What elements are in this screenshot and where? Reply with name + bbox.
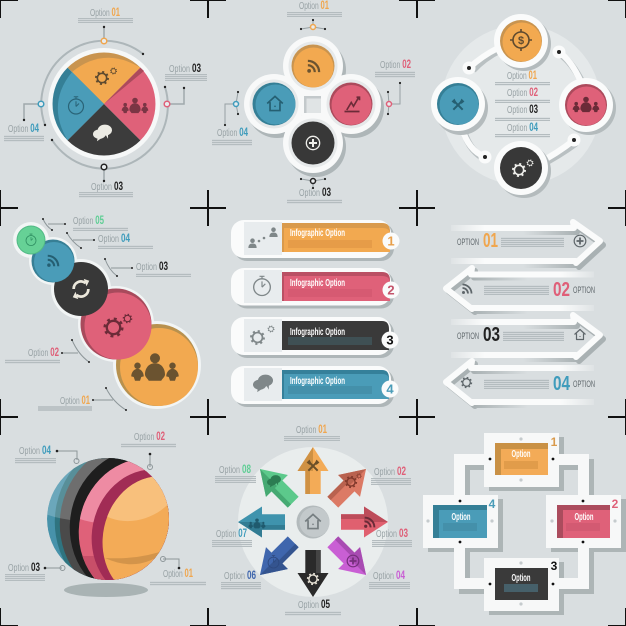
label: Option 01 bbox=[284, 422, 340, 441]
pill 1: Infographic Option bbox=[290, 228, 345, 239]
box 1 orange: Option bbox=[512, 449, 530, 460]
label: Option 01: Option 01 bbox=[90, 5, 120, 19]
label: Option 04: Option 04 bbox=[19, 443, 51, 457]
pie slice: blue stopwatch bbox=[53, 68, 104, 140]
label: Option 01: Option 01 bbox=[163, 566, 193, 580]
box 1 orange: 1 bbox=[551, 435, 558, 449]
label: Option 03 bbox=[5, 560, 45, 581]
box 4 blue bbox=[423, 495, 498, 548]
box 4 blue: Option bbox=[452, 512, 470, 523]
box 3 dark: 3 bbox=[551, 559, 558, 573]
label: Option 04 bbox=[15, 443, 56, 464]
circle: dark plus bbox=[288, 118, 338, 168]
box 2 pink: 2 bbox=[612, 497, 619, 511]
box 3 dark bbox=[484, 558, 559, 611]
arrow 05 bbox=[298, 550, 328, 597]
label: Option 01: Option 01 bbox=[60, 393, 90, 407]
panel: layered sphere bbox=[5, 432, 206, 597]
arrow 2: 02 bbox=[553, 279, 570, 301]
arrow 1: 01 bbox=[483, 230, 498, 252]
label: Option 05 bbox=[73, 213, 128, 231]
label: Option 01 bbox=[287, 0, 342, 17]
pill 3 bbox=[231, 317, 398, 358]
label: Option 03 bbox=[372, 526, 412, 547]
panel: descending circles bbox=[5, 213, 201, 411]
label: Option 01 bbox=[38, 393, 92, 411]
arrow 4 bbox=[446, 361, 597, 406]
circle: pink gears bbox=[80, 288, 152, 360]
connector nodes bbox=[224, 19, 401, 189]
arrow 1: OPTION bbox=[457, 237, 479, 247]
sphere layers bbox=[47, 458, 169, 580]
circle: green stopwatch bbox=[16, 226, 46, 254]
label: Option 06 bbox=[221, 568, 261, 590]
circle: pink people bbox=[559, 78, 616, 135]
connector ring bbox=[454, 454, 589, 589]
label: Option 04: Option 04 bbox=[8, 121, 39, 135]
label: Option 01 bbox=[78, 5, 133, 23]
pale disc bbox=[238, 447, 388, 597]
sphere shadow bbox=[64, 583, 148, 597]
label: Option 05: Option 05 bbox=[298, 597, 330, 611]
sphere orange cap bbox=[102, 476, 169, 580]
label: Option 04: Option 04 bbox=[373, 568, 405, 582]
centre square bbox=[304, 96, 321, 113]
label: Option 04 bbox=[369, 568, 410, 589]
label: Option 03 bbox=[287, 185, 342, 204]
arrow 3: OPTION bbox=[457, 331, 479, 341]
pill 3: 3 bbox=[386, 332, 394, 348]
shadows bbox=[428, 437, 626, 615]
panel: connected boxes bbox=[423, 433, 626, 615]
circle: orange dollar bbox=[494, 14, 551, 71]
circle: blue home bbox=[250, 80, 298, 128]
cluster shadow bbox=[247, 40, 384, 177]
arrow 3 bbox=[451, 315, 603, 361]
label: Option 03: Option 03 bbox=[8, 560, 40, 574]
arrow 07 bbox=[238, 506, 285, 538]
connector end dots bbox=[467, 50, 576, 159]
pill 2: 2 bbox=[387, 282, 395, 298]
label: Option 08: Option 08 bbox=[219, 462, 251, 476]
arrow 08 bbox=[249, 458, 304, 513]
label: Option 03: Option 03 bbox=[376, 526, 408, 540]
centre hub bbox=[296, 506, 330, 538]
label: Option 03 right bbox=[165, 61, 207, 81]
circle: dark sync bbox=[54, 262, 108, 316]
label: Option 03 bottom: Option 03 bbox=[91, 179, 123, 193]
pill 1: 1 bbox=[387, 234, 395, 248]
connector nodes bbox=[23, 26, 185, 182]
pill 2 bbox=[231, 268, 400, 308]
label: Option 01: Option 01 bbox=[296, 422, 327, 436]
label: Option 03 right: Option 03 bbox=[169, 61, 201, 75]
pill 4: 4 bbox=[386, 382, 394, 396]
option 02: Option 02 bbox=[507, 85, 538, 99]
label: Option 02: Option 02 bbox=[134, 429, 165, 443]
label: Option 07: Option 07 bbox=[216, 526, 247, 540]
label: Option 02 bbox=[121, 429, 176, 448]
label: Option 02 bbox=[375, 57, 415, 78]
label: Option 08 bbox=[215, 462, 256, 483]
pale disc bbox=[441, 25, 601, 185]
pill 2: Infographic Option bbox=[290, 278, 345, 289]
label: Option 02: Option 02 bbox=[374, 464, 406, 478]
label: Option 07 bbox=[212, 526, 252, 547]
label: Option 05: Option 05 bbox=[73, 213, 104, 227]
box 4 blue: 4 bbox=[489, 497, 496, 511]
label: Option 02 bbox=[5, 345, 60, 364]
pie ring bbox=[48, 48, 160, 160]
option 03: Option 03 bbox=[507, 102, 538, 116]
pie slice: orange gears bbox=[68, 53, 140, 104]
arrow 06 bbox=[249, 531, 304, 586]
label: Option 05 bbox=[285, 597, 341, 616]
white connectors shadow bbox=[464, 50, 583, 167]
white halos bbox=[13, 222, 201, 409]
leaders bbox=[44, 450, 180, 570]
label: Option 01 bbox=[150, 566, 206, 586]
label: Option 06: Option 06 bbox=[224, 568, 256, 582]
pie slice: pink people bbox=[104, 68, 155, 140]
pill 3: Infographic Option bbox=[290, 327, 345, 338]
leaders bbox=[42, 218, 133, 411]
panel: arrow banners bbox=[446, 222, 603, 406]
panel: radial arrows bbox=[212, 422, 412, 616]
panel: four circles cluster bbox=[212, 0, 415, 204]
arrow 02 bbox=[322, 458, 377, 513]
arrow 03 bbox=[341, 506, 388, 538]
pill 4: Infographic Option bbox=[290, 376, 345, 387]
box 2 pink bbox=[546, 495, 621, 548]
circle: blue tools bbox=[431, 77, 488, 135]
arrow 04 bbox=[322, 531, 377, 586]
circle: orange dollar: $ bbox=[518, 35, 524, 47]
arrow 4: OPTION bbox=[573, 379, 595, 389]
panel: pie diagram bbox=[4, 5, 207, 198]
arrow 1 bbox=[451, 222, 603, 267]
panel: ring of circles bbox=[431, 14, 616, 198]
centre options list bbox=[495, 68, 550, 138]
white rings bbox=[244, 36, 381, 173]
arrow icons bbox=[248, 460, 374, 584]
label: Option 03: Option 03 bbox=[299, 185, 331, 199]
label: Option 03 bottom bbox=[79, 179, 133, 198]
label: Option 04: Option 04 bbox=[217, 125, 248, 139]
label: Option 03: Option 03 bbox=[136, 259, 168, 273]
white connectors bbox=[462, 46, 581, 165]
circle: orange people bbox=[116, 324, 198, 406]
circle: pink chart bbox=[326, 80, 376, 128]
arrow 01 bbox=[298, 447, 328, 494]
panel: option pills bbox=[231, 220, 400, 407]
label: Option 04: Option 04 bbox=[98, 231, 130, 245]
label: Option 04 bbox=[4, 121, 44, 142]
label: Option 03 bbox=[136, 259, 191, 277]
label: Option 02 bbox=[371, 464, 411, 485]
arrow 2: OPTION bbox=[573, 285, 595, 295]
box 3 dark: Option bbox=[512, 573, 530, 584]
pill 4 bbox=[231, 366, 398, 407]
arrow 3: 03 bbox=[483, 324, 500, 346]
circle: dark gears bbox=[494, 141, 551, 198]
box 2 pink: Option bbox=[574, 512, 594, 523]
option 04: Option 04 bbox=[507, 120, 538, 134]
label: Option 04 bbox=[98, 231, 153, 249]
box 1 orange bbox=[484, 433, 559, 487]
outer arcs bbox=[41, 41, 168, 169]
circle: blue wifi bbox=[32, 240, 74, 282]
label: Option 02: Option 02 bbox=[28, 345, 59, 359]
circle: orange rss bbox=[288, 42, 338, 90]
arrow 4: 04 bbox=[553, 373, 571, 395]
label: Option 04 bbox=[212, 125, 252, 146]
option 01: Option 01 bbox=[507, 68, 537, 82]
label: Option 02: Option 02 bbox=[380, 57, 411, 71]
arrow 2 bbox=[446, 268, 597, 312]
pie slice: dark chat bbox=[68, 104, 140, 155]
pill 1 bbox=[231, 220, 400, 261]
